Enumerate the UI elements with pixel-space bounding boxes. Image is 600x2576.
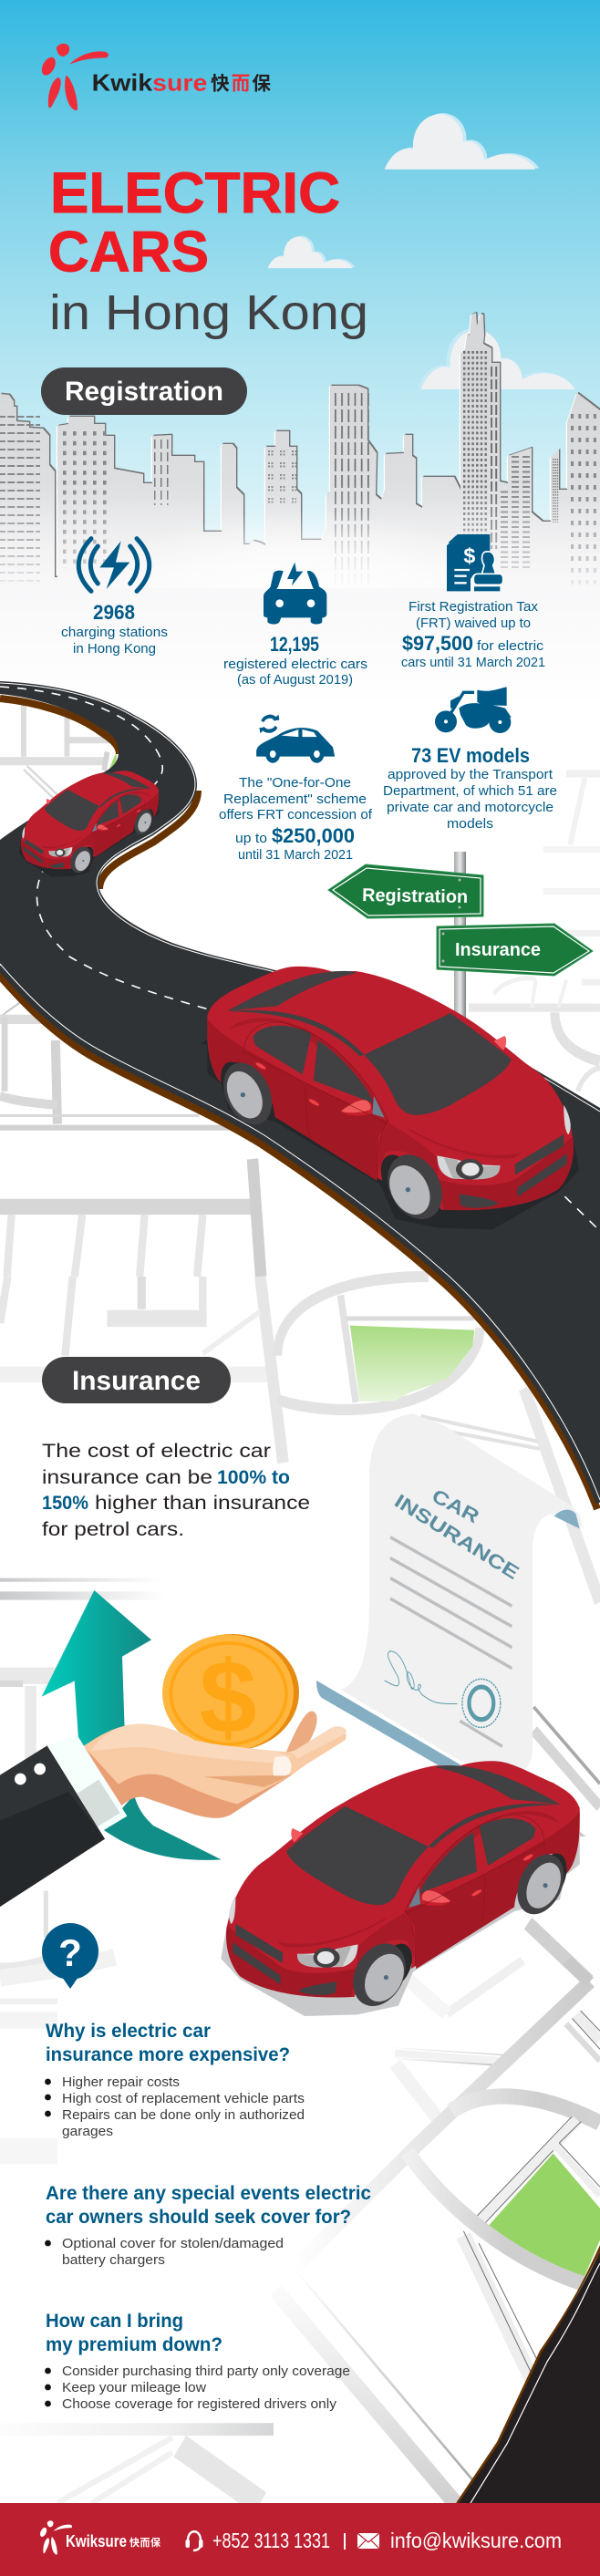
question: special events <box>45 2183 371 2268</box>
stat: one-for-one replacement scheme: up to <box>235 831 267 846</box>
question: special events: Are there any special events electric <box>46 2183 371 2204</box>
stat: registered electric cars: 12,195 <box>270 633 319 656</box>
road: winding road through the page <box>0 681 600 1509</box>
lower background below skyline <box>0 588 600 707</box>
footer logo: 快而保 <box>129 2536 160 2549</box>
email address: info@kwiksure.com <box>390 2529 562 2552</box>
logo wordmark: Kwiksure <box>92 68 207 96</box>
icon: car with recycle arrows <box>256 715 335 763</box>
stat: one-for-one replacement scheme: offers FRT concession of <box>219 807 373 822</box>
title: in Hong Kong <box>49 285 368 340</box>
heading pill: Insurance: Insurance <box>72 1366 201 1396</box>
question: bring premium down: Consider purchasing third party only coverage <box>62 2364 350 2379</box>
question: bring premium down: Choose coverage for registered drivers only <box>62 2397 337 2412</box>
stat: one-for-one replacement scheme: until 31 March 2021 <box>238 847 353 863</box>
title: CARS <box>48 221 209 284</box>
question: why more expensive <box>45 2021 305 2139</box>
question: why more expensive: Repairs can be done only in authorized <box>62 2108 305 2123</box>
cloud: behind tower <box>418 328 575 389</box>
insurance cost paragraph: 150% <box>42 1493 88 1514</box>
insurance cost paragraph: 100% to <box>217 1467 290 1488</box>
logo chinese name: 快而保 <box>211 74 271 95</box>
title <box>48 161 368 340</box>
question: special events: Optional cover for stolen/damaged <box>62 2237 284 2251</box>
stat: 73 EV models: 73 EV models <box>411 744 530 767</box>
icon: tax document and stamp <box>447 534 503 591</box>
heading pill: Insurance <box>42 1357 231 1403</box>
icon: gold coin: $ <box>199 1640 257 1755</box>
red car near document <box>221 1761 586 2016</box>
map background: insurance section <box>0 1277 600 1981</box>
road sign: Insurance: Insurance <box>455 940 541 960</box>
question: why more expensive: Higher repair costs <box>62 2075 180 2090</box>
footer bar <box>0 2503 600 2576</box>
title: ELECTRIC <box>50 161 340 225</box>
arrow: price going up <box>42 1590 222 1860</box>
insurance cost paragraph: The cost of electric car <box>42 1441 271 1462</box>
icon: electric car <box>264 563 326 625</box>
stat: 73 EV models: models <box>447 816 493 832</box>
city skyline <box>0 312 600 603</box>
map background: FAQ section right with green park <box>295 1960 600 2391</box>
sleeve and cuff <box>0 1735 127 1907</box>
stat: first registration tax <box>401 534 545 670</box>
question: why more expensive: Why is electric car <box>46 2021 211 2042</box>
stat: registered electric cars: (as of August 2019) <box>237 672 353 688</box>
stat: charging stations: in Hong Kong <box>73 641 156 657</box>
clouds <box>268 113 575 389</box>
question: bring premium down <box>45 2311 350 2412</box>
question: bring premium down: my premium down? <box>46 2334 222 2355</box>
icon: gold coin <box>162 1634 299 1755</box>
cloud: large <box>385 113 539 170</box>
rising arrow, hand and coin <box>0 1590 347 1907</box>
icon: motorcycle <box>435 687 512 733</box>
stat: registered electric cars: registered electric cars <box>223 657 367 672</box>
footer logo <box>39 2520 160 2555</box>
insurance cost paragraph: insurance can be <box>42 1467 212 1488</box>
insurance cost paragraph <box>42 1441 310 1540</box>
icon: headset <box>186 2531 202 2550</box>
stat: first registration tax: (FRT) waived up to <box>416 616 531 631</box>
stat: one-for-one replacement scheme: Replacement" scheme <box>223 791 367 807</box>
stat: first registration tax: for electric <box>477 638 544 654</box>
car insurance document <box>316 1414 582 1771</box>
car insurance document: CAR <box>429 1485 482 1527</box>
question: special events: car owners should seek cover for? <box>46 2207 351 2228</box>
road sign: Registration: Registration <box>362 885 468 907</box>
large red car on road <box>201 967 579 1229</box>
insurance cost paragraph: for petrol cars. <box>42 1519 184 1540</box>
road: lower right corner <box>456 2245 600 2503</box>
insurance cost paragraph: higher than insurance <box>95 1493 310 1514</box>
logo <box>39 44 271 110</box>
icon: question mark bubble: ? <box>58 1931 82 1974</box>
icon: question mark bubble <box>42 1923 98 1989</box>
heading pill: Registration: Registration <box>65 377 223 407</box>
car insurance document: INSURANCE <box>390 1491 522 1584</box>
heading pill: Registration <box>41 367 247 415</box>
stat: 73 EV models <box>383 687 557 832</box>
icon: envelope <box>357 2533 379 2549</box>
stat: 73 EV models: approved by the Transport <box>388 767 553 782</box>
question: why more expensive: High cost of replacement vehicle parts <box>62 2092 305 2106</box>
icon: charging bolt <box>78 539 150 591</box>
stat: charging stations: charging stations <box>61 625 168 640</box>
map background: FAQ section left <box>0 1957 472 2503</box>
stat: one-for-one replacement scheme: The "One-for-One <box>239 775 351 791</box>
stat: one-for-one replacement scheme <box>219 715 373 863</box>
road sign: Insurance <box>437 924 593 976</box>
question: why more expensive: garages <box>62 2125 113 2139</box>
stat: 73 EV models: Department, of which 51 are <box>383 783 557 799</box>
stat: first registration tax: First Registration Tax <box>409 599 538 615</box>
stat: first registration tax: cars until 31 March 2021 <box>401 655 545 670</box>
small red car on road <box>19 771 161 877</box>
stat: charging stations <box>61 539 168 657</box>
stat: first registration tax: $97,500 <box>402 632 473 655</box>
hand <box>84 1711 347 1818</box>
phone number: +852 3113 1331 <box>212 2529 330 2552</box>
stat: one-for-one replacement scheme: $250,000 <box>272 824 355 847</box>
road sign post <box>454 852 466 1021</box>
stat: charging stations: 2968 <box>93 601 135 624</box>
sky background <box>0 0 600 602</box>
question: why more expensive: insurance more expensive? <box>46 2044 290 2065</box>
footer logo: Kwiksure <box>66 2532 127 2550</box>
question: bring premium down: Keep your mileage low <box>62 2381 207 2395</box>
icon: tax document and stamp: $ <box>463 543 475 567</box>
road sign: Registration <box>328 864 483 918</box>
logo mark <box>39 44 109 110</box>
question: bring premium down: How can I bring <box>46 2311 183 2332</box>
stat: 73 EV models: private car and motorcycle <box>387 800 553 815</box>
question: special events: battery chargers <box>62 2253 165 2268</box>
cloud: small <box>268 236 356 268</box>
map background: upper section <box>0 705 600 1277</box>
stat: registered electric cars <box>223 563 367 688</box>
